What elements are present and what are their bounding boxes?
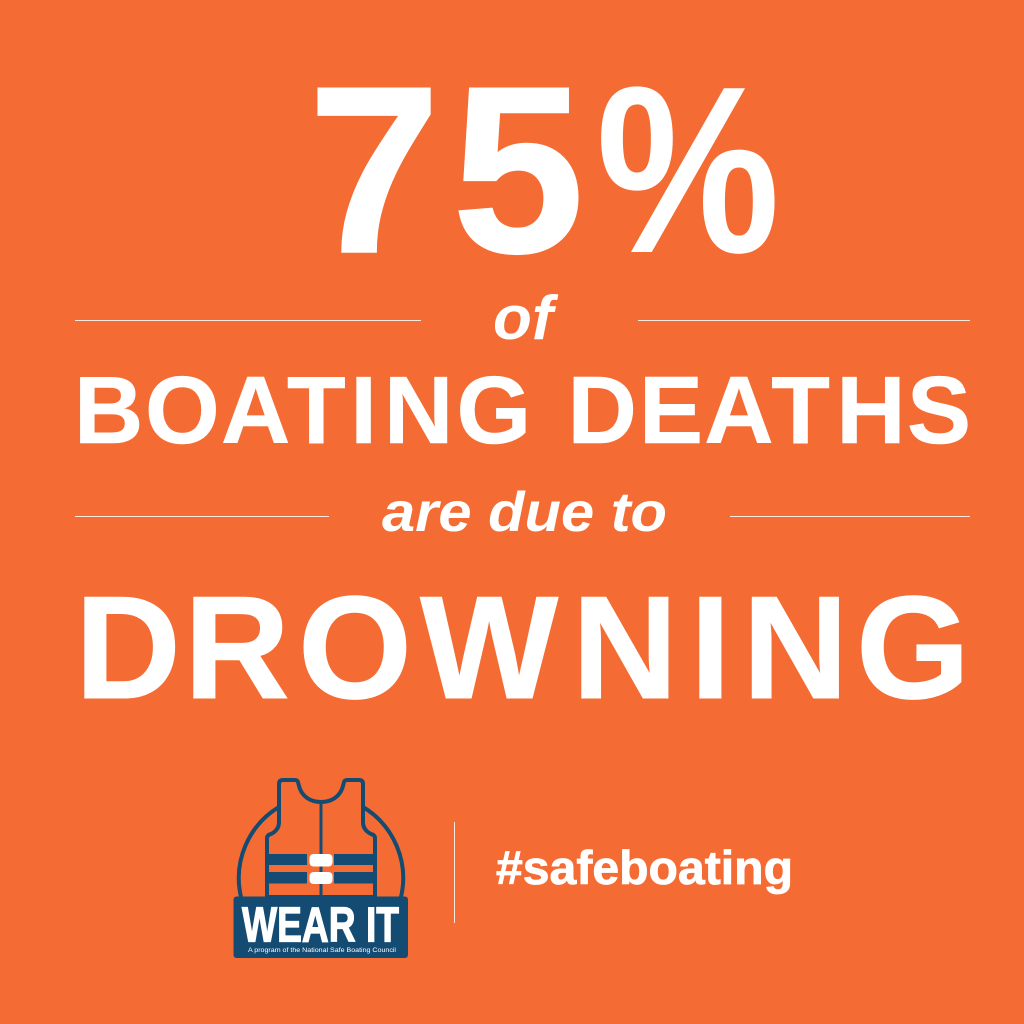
headline statistic: 75%: 75 [308,38,584,303]
banner [234,896,408,958]
icon: life jacket [267,780,375,897]
logo: Wear It life jacket [234,780,408,958]
text: of: of [493,284,558,353]
heading: drowning: DROWNING [75,566,970,730]
headline statistic: 75%: % [596,38,780,303]
text: are due to: are due to [382,480,667,543]
icon: life ring arcs [239,807,403,897]
heading: boating deaths: BOATING DEATHS [74,357,971,464]
logo tagline: A program of the National Safe Boating Council [248,947,397,954]
headline statistic: 75% [308,38,780,303]
logo wordmark: WEAR IT [242,898,399,952]
hashtag: #safeboating [496,841,793,894]
